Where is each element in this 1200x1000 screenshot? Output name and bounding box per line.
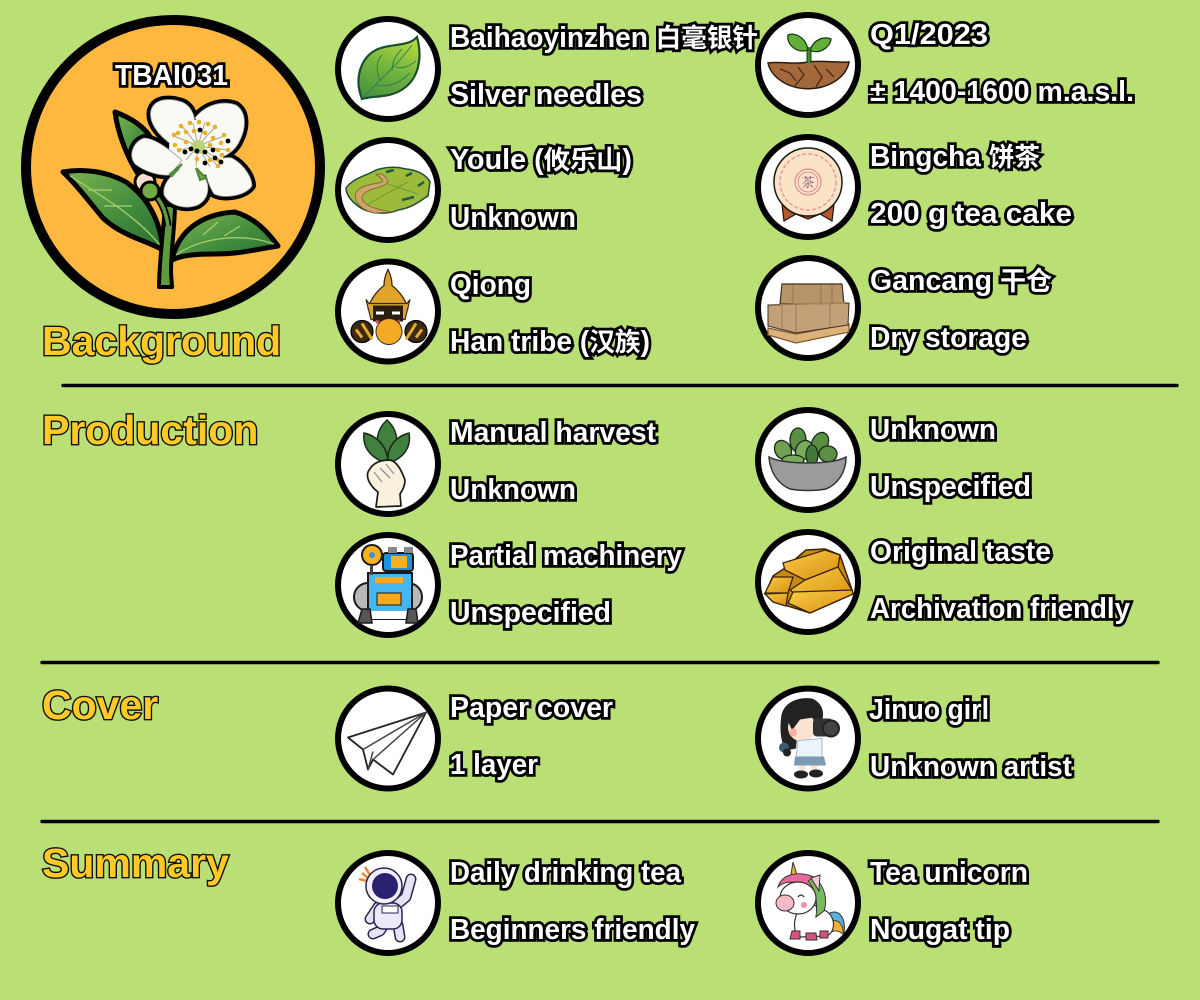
- icon: boxes on pallet: [758, 258, 858, 358]
- icon: tea cake on stand: [758, 137, 858, 237]
- item: shape: [758, 137, 1072, 237]
- text: Qiong: Qiong: [450, 269, 531, 301]
- heading: Summary: Summary: [42, 840, 229, 886]
- item: origin: [338, 140, 632, 240]
- text: unknown: Unknown: [870, 414, 996, 446]
- item: processing: [338, 535, 682, 635]
- text: altitude: ± 1400-1600 m.a.s.l.: [870, 76, 1134, 108]
- text: layers: 1 layer: [450, 749, 538, 781]
- icon: unicorn: [758, 853, 858, 953]
- icon: paper plane: [338, 688, 438, 788]
- heading: Background: Background: [42, 318, 281, 364]
- text: Han tribe: Han tribe (汉族): [450, 326, 650, 358]
- text: archivation friendly: Archivation friendly: [870, 593, 1130, 625]
- text: tea type: Baihaoyinzhen 白毫银针: [450, 22, 758, 54]
- text: Youle: Youle (攸乐山): [450, 144, 632, 176]
- text: unspecified: Unspecified: [870, 471, 1031, 503]
- icon: golden warrior: [338, 262, 438, 362]
- icon: tea cake on stand: 茶: [801, 172, 815, 191]
- heading: Cover: Cover: [42, 682, 158, 728]
- text: nougat tip: Nougat tip: [870, 914, 1010, 946]
- text: jinuo girl: Jinuo girl: [869, 694, 989, 726]
- text: unknown: Unknown: [450, 474, 576, 506]
- icon: gold bars: [758, 532, 858, 632]
- item: storage: [758, 258, 1052, 358]
- text: dry storage: Dry storage: [870, 322, 1027, 354]
- item: ethnic group: [338, 262, 650, 362]
- item: cover art: [758, 688, 1072, 788]
- item: cover material: [338, 688, 613, 788]
- icon: astronaut: [338, 853, 438, 953]
- text: weight: 200 g tea cake: [870, 198, 1072, 230]
- item: aging potential: [758, 532, 1130, 632]
- item: summary character: [758, 853, 1028, 953]
- text: silver needles: Silver needles: [450, 79, 642, 111]
- item: oxidation: [758, 410, 1031, 510]
- text: Bingcha: Bingcha 饼茶: [870, 141, 1040, 173]
- text: original taste: Original taste: [870, 536, 1051, 568]
- text: daily drinking tea: Daily drinking tea: [450, 857, 682, 889]
- icon: tea flower: [63, 100, 278, 287]
- text: partial machinery: Partial machinery: [450, 540, 682, 572]
- icon: seedling in soil: [758, 15, 858, 115]
- icon: bowl of leaves: [758, 410, 858, 510]
- text: Gancang: Gancang 干仓: [870, 265, 1052, 297]
- icon: leaf: [338, 19, 438, 119]
- icon: mountain landscape: [338, 140, 438, 240]
- item: summary type: [338, 853, 695, 953]
- medallion circle: [26, 20, 320, 314]
- text: date: Q1/2023: [870, 19, 988, 51]
- icon: girl with camera: [758, 688, 858, 788]
- text: beginners friendly: Beginners friendly: [450, 914, 695, 946]
- icon: machine: [338, 535, 438, 635]
- item: harvest: [338, 414, 656, 514]
- text: tea unicorn: Tea unicorn: [870, 857, 1028, 889]
- item: tea type: [338, 19, 758, 119]
- item: harvest date: [758, 15, 1134, 115]
- text: unspecified: Unspecified: [450, 597, 611, 629]
- text: unknown artist: Unknown artist: [870, 751, 1072, 783]
- icon: hand holding leaves: [338, 414, 438, 514]
- text: manual harvest: Manual harvest: [450, 417, 656, 449]
- heading: Production: Production: [42, 407, 258, 453]
- text: paper cover: Paper cover: [450, 692, 613, 724]
- label: TBAI031: TBAI031: [115, 60, 228, 92]
- panel: tea medallion: [26, 20, 320, 314]
- text: Unknown: Unknown: [450, 202, 576, 234]
